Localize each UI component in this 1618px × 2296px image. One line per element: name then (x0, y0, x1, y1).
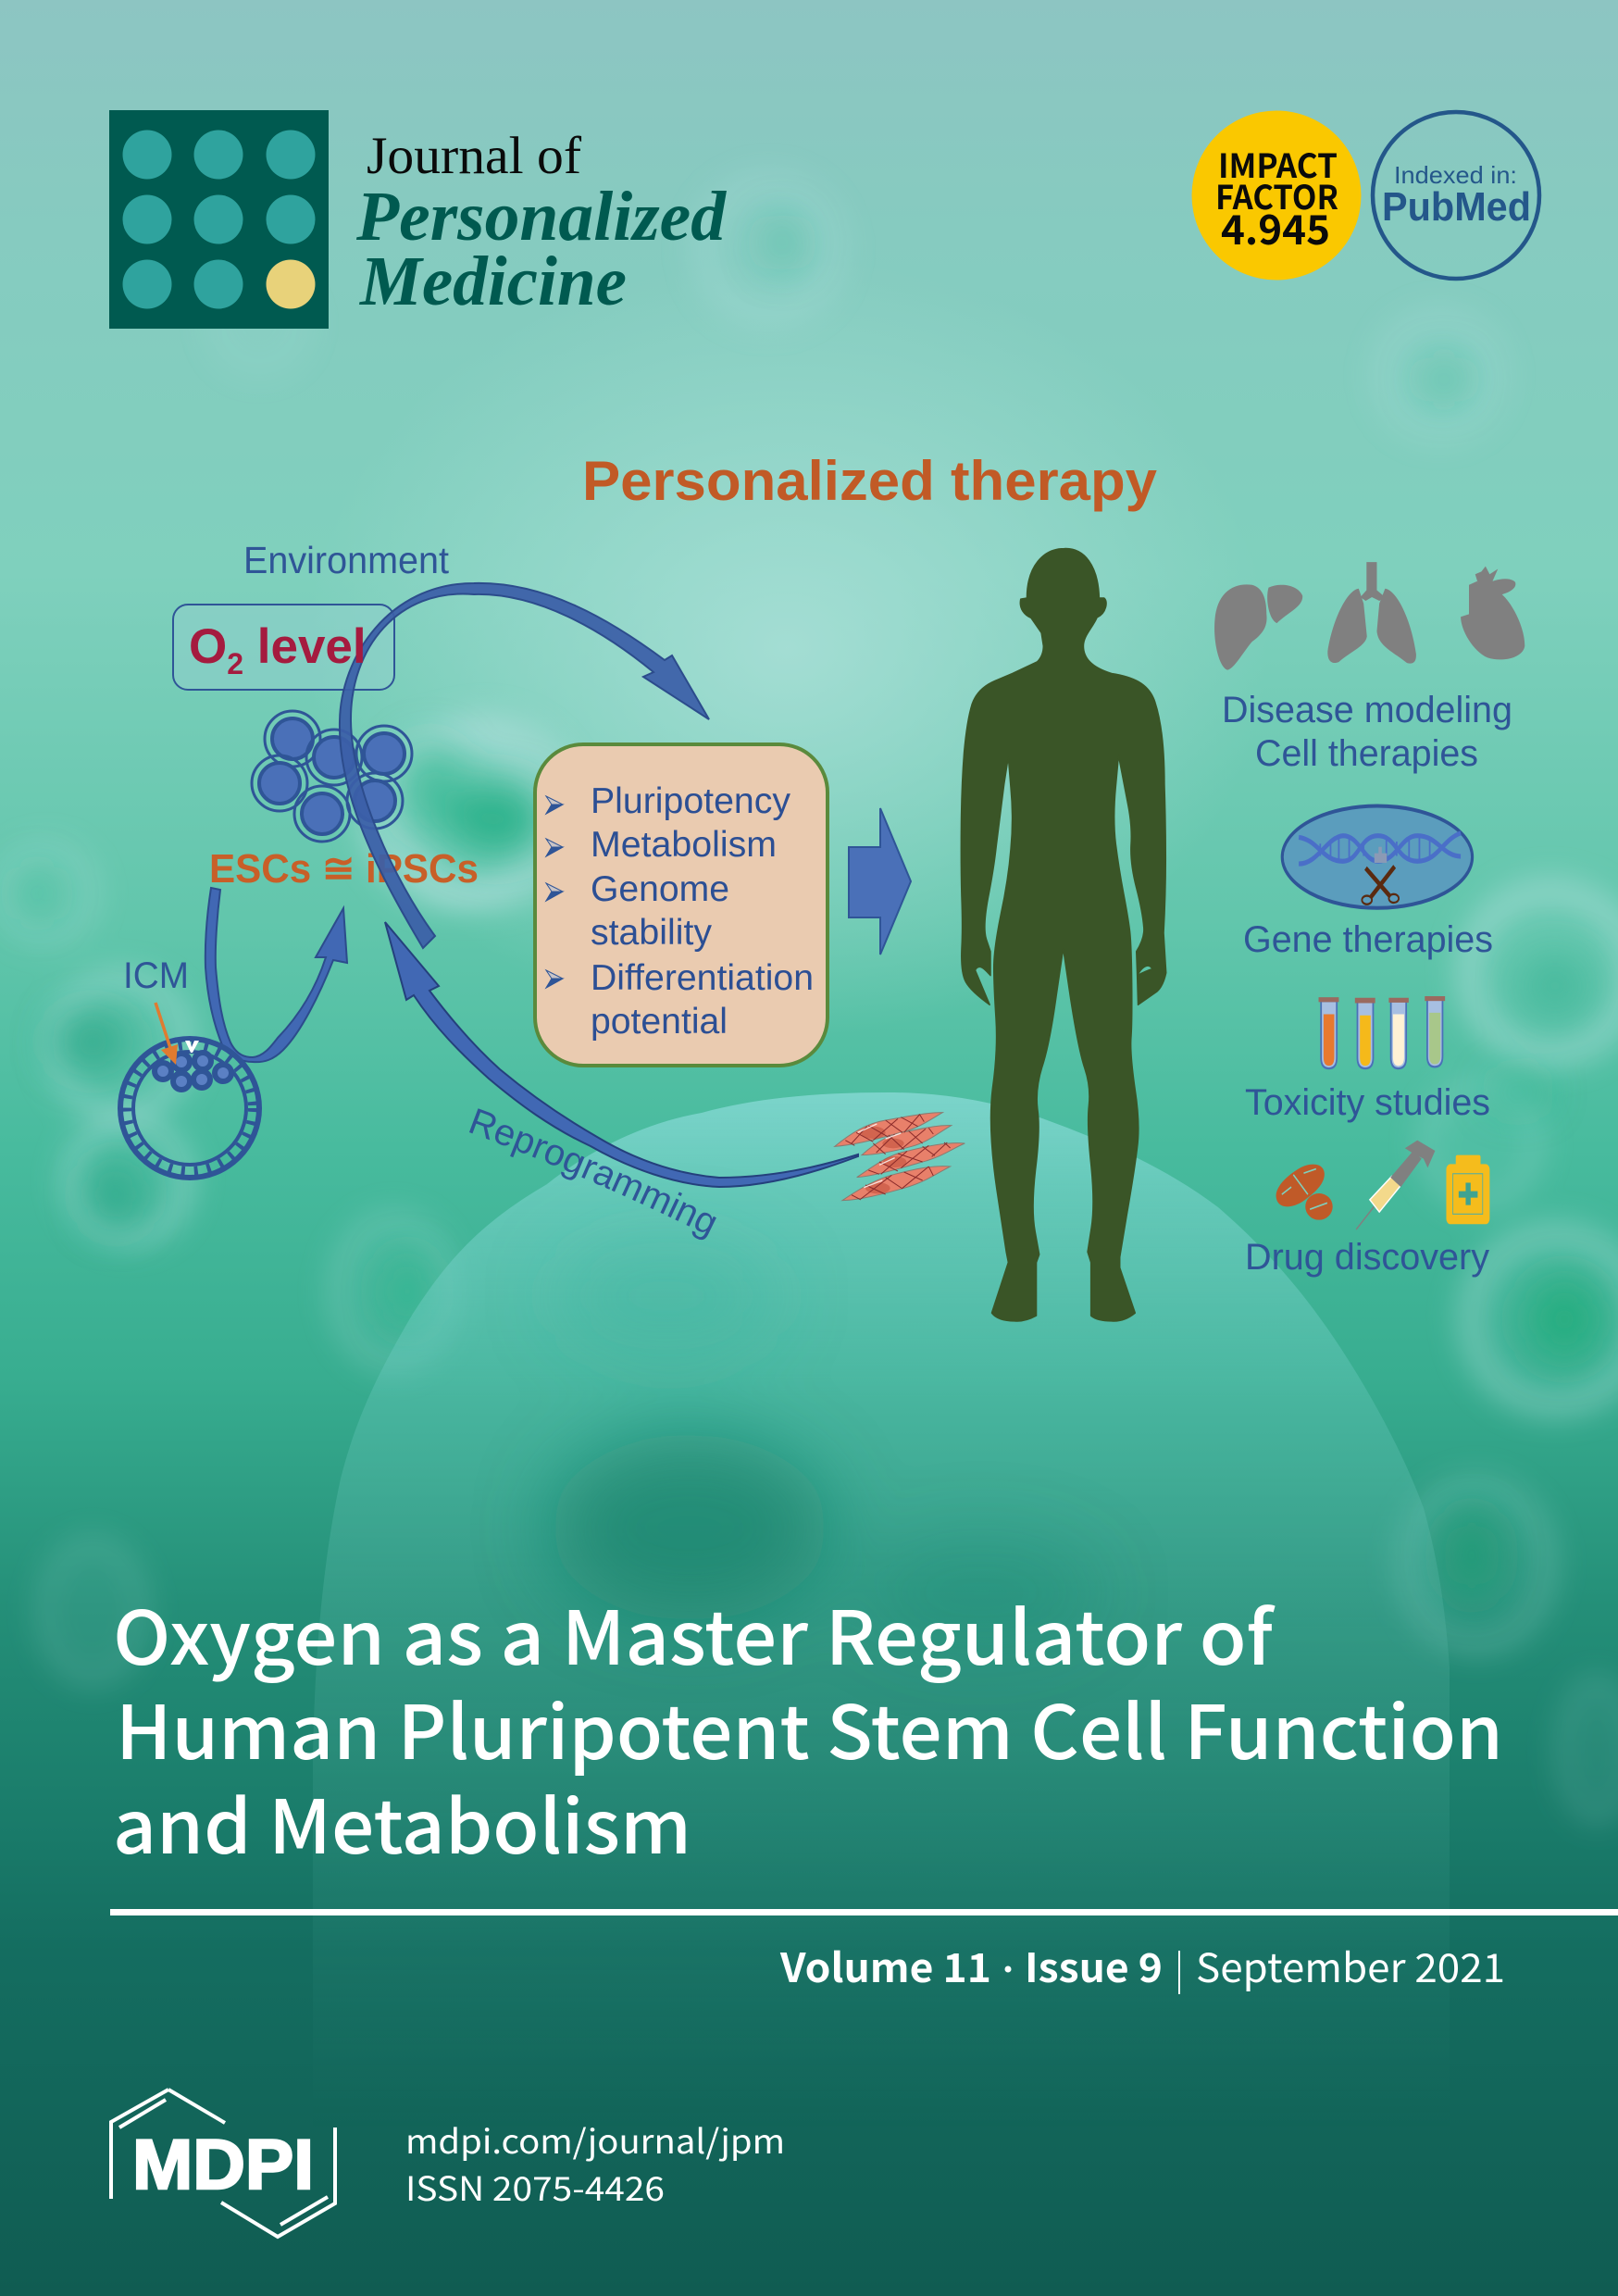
blastocyst (120, 1039, 259, 1178)
label: drug discovery: Drug discovery (1245, 1237, 1489, 1278)
properties list: Genome (591, 869, 729, 909)
journal URL and ISSN: ISSN 2075-4426 (405, 2163, 665, 2211)
impact factor badge: FACTOR (1215, 171, 1338, 219)
label: O2 level: level (243, 619, 367, 674)
icon: muscle cells (835, 1113, 965, 1201)
journal URL and ISSN: mdpi.com/journal/jpm (405, 2115, 785, 2164)
journal name (355, 127, 727, 320)
issue information: Volume 11 (779, 1937, 991, 1994)
icon: test tubes (1319, 996, 1445, 1068)
properties list (591, 781, 814, 1042)
PubMed badge (1373, 112, 1539, 279)
article title: and Metabolism (113, 1768, 691, 1876)
human silhouette (961, 549, 1166, 1321)
properties list: Metabolism (591, 825, 777, 865)
labels: disease modeling and cell therapies: Disease modeling (1222, 690, 1512, 730)
O2 level box (173, 605, 394, 690)
arrow: reprogramming (385, 922, 858, 1187)
heading: personalized therapy: Personalized therapy (582, 450, 1158, 512)
MDPI logo: MDPI (132, 2126, 314, 2204)
properties list: Differentiation (591, 958, 814, 998)
MDPI logo (111, 2090, 335, 2237)
PubMed badge: PubMed (1382, 184, 1531, 230)
icons: liver, lungs, heart (1214, 562, 1525, 670)
icon: DNA and scissors (1282, 806, 1473, 908)
label: environment: Environment (243, 539, 450, 581)
label: reprogramming: Reprogramming (469, 1108, 716, 1241)
label: toxicity studies: Toxicity studies (1245, 1082, 1490, 1123)
icons: pills, syringe, bottle (1276, 1141, 1489, 1229)
background glow (305, 259, 1268, 1037)
article title: Human Pluripotent Stem Cell Function (116, 1674, 1503, 1781)
arrow: environment curve (340, 583, 709, 948)
sphere: large cell (313, 1092, 1450, 2129)
impact factor badge: 4.945 (1221, 197, 1330, 256)
label: O2 level: 2 (227, 647, 243, 680)
journal name: Journal of (367, 127, 581, 185)
journal name: Medicine (359, 243, 627, 320)
issue information: September 2021 (1196, 1937, 1505, 1994)
impact factor badge: IMPACT (1218, 140, 1338, 188)
stem cell cluster (252, 711, 412, 842)
panel: properties box (535, 744, 828, 1066)
bullet arrowheads (546, 796, 563, 988)
PubMed badge: Indexed in: (1394, 161, 1517, 189)
journal logo square (109, 110, 329, 329)
label: gene therapies: Gene therapies (1243, 919, 1493, 960)
article title (113, 1579, 1503, 1876)
arrow: orange ICM pointer (156, 1003, 178, 1065)
properties list: potential (591, 1002, 728, 1042)
labels: disease modeling and cell therapies (1222, 690, 1512, 774)
properties list: stability (591, 913, 713, 953)
article title: Oxygen as a Master Regulator of (113, 1579, 1276, 1687)
label: O2 level: O (189, 619, 227, 674)
issue information (779, 1937, 1505, 1994)
labels: disease modeling and cell therapies: Cell therapies (1255, 733, 1478, 774)
arrow: block arrow to human (849, 808, 911, 955)
reprogramming text path (467, 1131, 728, 1245)
journal name: Personalized (355, 178, 727, 256)
title rule (110, 1909, 1618, 1915)
label: ICM: ICM (123, 955, 189, 996)
impact factor badge (1192, 111, 1361, 280)
journal URL and ISSN (405, 2115, 785, 2211)
background blurred cells (0, 183, 1618, 1819)
issue information: Issue 9 (1025, 1937, 1163, 1994)
label: ESCs and iPSCs: ESCs ≅ iPSCs (209, 846, 479, 892)
properties list: Pluripotency (591, 781, 790, 821)
arrow: ICM to ESCs (205, 888, 347, 1062)
